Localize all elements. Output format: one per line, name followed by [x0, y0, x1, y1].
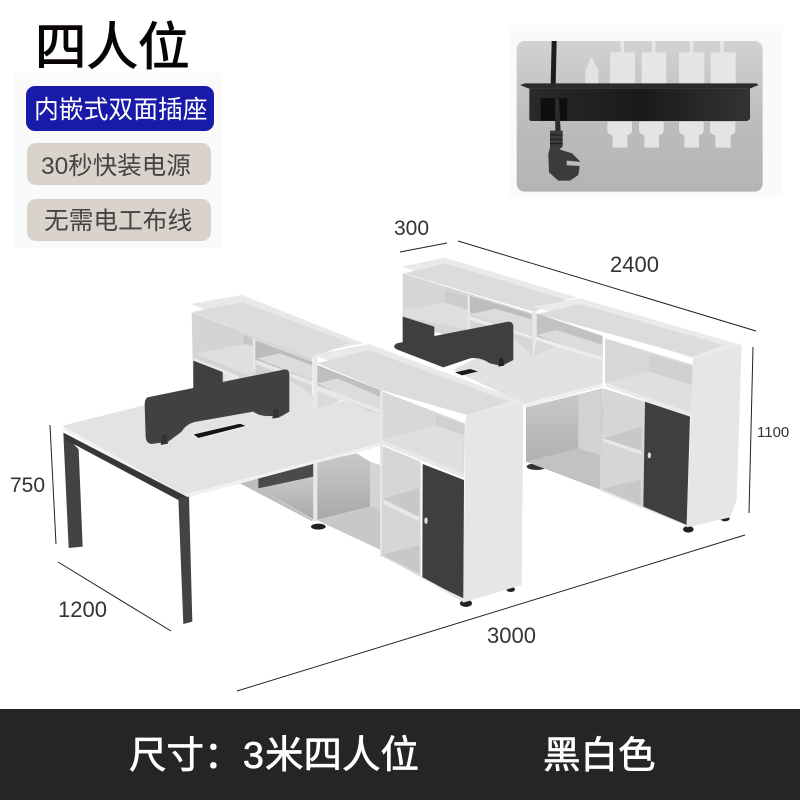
- storage below desk: [237, 453, 381, 550]
- dimension: 1100: [749, 347, 789, 513]
- cable slot: [193, 423, 247, 438]
- tag: embedded double-sided socket: [26, 86, 214, 131]
- dimension: 750: [10, 425, 56, 544]
- size label: 3: [243, 734, 264, 776]
- tag: 30 second install: 30秒快装电源: [41, 152, 191, 180]
- dimension: 1200: 1200: [58, 597, 107, 622]
- desk top with cable slot and screen: [63, 355, 381, 501]
- panel: feature tags: [14, 73, 221, 248]
- hutch: right shelves: [313, 344, 523, 603]
- colour label: 黑白色: [543, 734, 656, 776]
- desk unit: rear: [394, 258, 742, 533]
- size label: 米四人位: [265, 734, 419, 777]
- tag: 30 second install: [27, 143, 211, 185]
- hutch: left shelves: [191, 295, 363, 417]
- dimension: 3000: [237, 535, 745, 691]
- screen clamps: [161, 409, 280, 445]
- tag: embedded double-sided socket: 内嵌式双面插座: [34, 96, 208, 124]
- desk leg: left: [63, 433, 83, 548]
- desk leg: right: [178, 497, 192, 624]
- screen: [145, 369, 289, 444]
- dimension: 1100: 1100: [757, 424, 789, 441]
- desk unit: front: [63, 295, 523, 624]
- panel: socket photo: [509, 25, 783, 197]
- dimension: 1200: [58, 562, 171, 631]
- bottom banner: [0, 709, 800, 800]
- tag: no wiring needed: 无需电工布线: [44, 207, 192, 235]
- size label: [129, 734, 419, 777]
- dimension: 2400: [458, 241, 756, 331]
- dimension: 3000: 3000: [487, 623, 536, 648]
- title: 四人位: [35, 18, 190, 76]
- dimension: 300: 300: [394, 217, 429, 240]
- dimension: 750: 750: [10, 474, 45, 497]
- tag: no wiring needed: [27, 199, 211, 241]
- dimension: 300: [394, 217, 447, 252]
- dimension: 2400: 2400: [610, 252, 659, 277]
- size label: 尺寸：: [129, 734, 242, 776]
